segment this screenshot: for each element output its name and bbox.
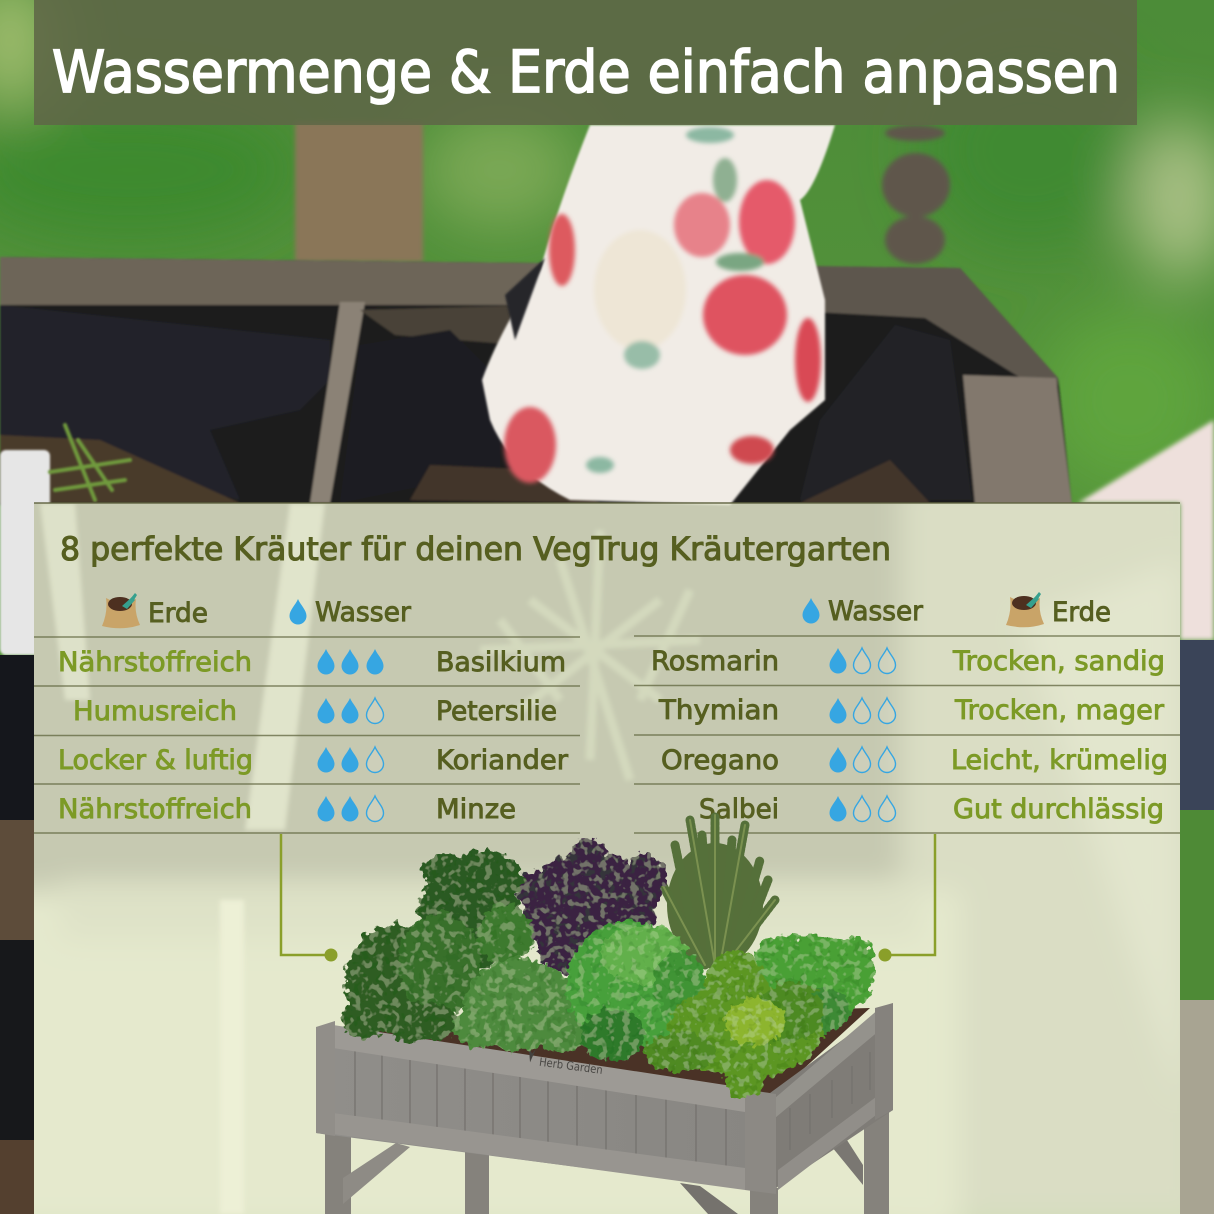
column header: Wasser left: Wasser [315,597,412,628]
right table row: Thymian [658,695,1165,726]
outer strips and soil under panel [0,450,1214,1214]
right table row: Oregano: Oregano [661,745,779,776]
left table row: Koriander: Locker & luftig [58,745,253,776]
left table row: Minze [58,794,516,825]
glove roses [594,230,686,350]
left table row: Basilikum: Nährstoffreich [58,647,252,678]
rosemary sprig [50,425,130,500]
distant figure top right [1078,420,1214,640]
right table row: Salbei: Gut durchlässig [953,794,1164,825]
wooden post [295,122,423,262]
herb: oregano left [341,913,482,1042]
herb: basil [566,921,706,1061]
metal finial [882,125,950,264]
left table row: Minze: Minze [436,794,516,825]
left table row: Petersilie: Petersilie [436,696,557,727]
icon: soil sack right [1006,592,1044,627]
connector left [281,834,338,962]
front boards [316,1027,770,1192]
planter brand: Herb Garden [538,1055,604,1077]
panel: herb table [34,502,1180,1214]
right table row: Thymian: Thymian [658,695,779,726]
right table row: Salbei: Salbei [699,794,779,825]
icon: soil sack left [102,593,140,628]
left table row: Minze: Nährstoffreich [58,794,252,825]
left table row: Basilikum [58,647,566,678]
posts [316,1021,335,1136]
left table row: Petersilie [73,696,557,727]
icon: water drop right [802,598,820,624]
herb: dark mint [418,850,533,970]
planter brand [526,1048,604,1077]
title bar [34,0,1137,125]
right table row: Rosmarin: Rosmarin [651,646,779,677]
column header: Erde right: Erde [1052,597,1111,628]
soil [345,1008,870,1095]
bottom rail [333,1113,745,1190]
herb: purple basil [518,838,665,974]
herbs [341,838,875,1098]
right table row: Salbei [699,794,1164,825]
left table row: Petersilie: Humusreich [73,696,237,727]
right table row: Oregano: Leicht, krümelig [951,745,1168,776]
left table row: Basilikum: Basilkium [436,647,566,678]
icon: water drop left [290,599,306,624]
gardening glove [482,125,835,505]
right side face [770,1003,893,1192]
right table row: Rosmarin [651,646,1165,677]
column header: Wasser right: Wasser [828,596,924,627]
connector right [878,834,935,962]
left table row: Koriander: Koriander [436,745,569,776]
title: Wassermenge & Erde einfach anpassen [52,38,1120,106]
blurred rosemary under panel [480,530,700,780]
herb: small mint [452,959,590,1052]
right table row: Rosmarin: Trocken, sandig [952,646,1165,677]
planter frame [0,257,1072,505]
herb: rosemary [660,815,775,967]
planter legs [325,1095,889,1214]
top rail [333,1025,745,1112]
raised bed planter [316,1003,893,1194]
herb: parsley [644,951,824,1098]
right table row: Oregano [661,745,1168,776]
left table row: Koriander [58,745,569,776]
column header: Erde left: Erde [148,598,208,629]
herb: right oregano [755,935,875,1032]
right table row: Thymian: Trocken, mager [954,695,1165,726]
heading: 8 perfekte Kräuter für deinen VegTrug Kräutergarten [60,530,891,568]
